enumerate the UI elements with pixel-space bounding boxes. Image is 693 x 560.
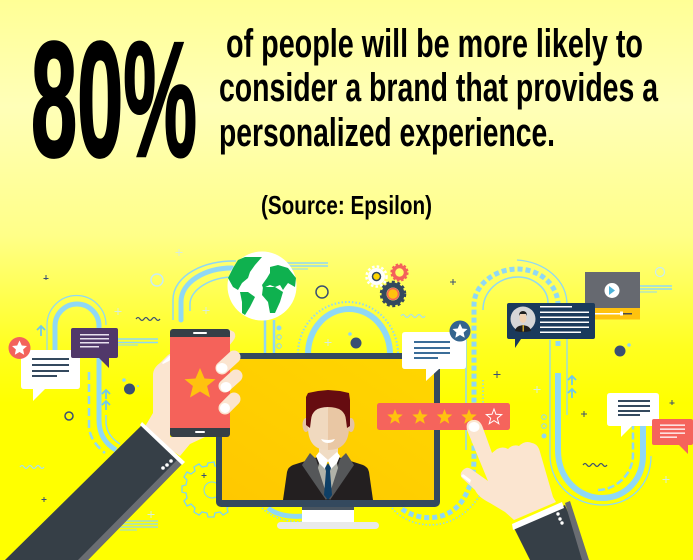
panel: right white chat bubble: [607, 393, 659, 437]
person avatar: [283, 390, 373, 500]
monitor base: [277, 522, 379, 529]
sleeve: [5, 425, 182, 560]
panel: right red chat bubble: [652, 419, 693, 454]
monitor screen: [222, 359, 434, 500]
fingers: [222, 357, 236, 408]
sleeve: [514, 505, 588, 560]
icon: pointing hand with sleeve: [461, 420, 589, 560]
panel: left chat bubble with star badge: [8, 337, 80, 401]
icon: globe: [228, 252, 296, 320]
monitor: [216, 353, 440, 529]
icon: gears: [366, 264, 408, 306]
source line: (Source: Epsilon): [261, 190, 432, 220]
icon: arm holding smartphone: [5, 329, 236, 560]
text block: statement: personalized experience.: [219, 111, 555, 155]
background connector lines: [47, 260, 672, 530]
panel: purple chat bubble: [71, 328, 118, 368]
gear outline: [182, 462, 240, 517]
panel: profile chat bubble: [507, 303, 595, 348]
panel: rating stars: [377, 403, 510, 430]
heading: 80% statistic: 80%: [31, 8, 197, 191]
monitor frame: [216, 353, 440, 507]
smartphone: [170, 329, 230, 437]
monitor stand: [302, 506, 354, 523]
decorative arrows and dots: [20, 249, 674, 518]
hand: [143, 353, 205, 456]
text block: statement: [219, 22, 659, 155]
panel: centre chat bubble with star badge: [402, 320, 470, 381]
icon: video player: [585, 272, 640, 320]
